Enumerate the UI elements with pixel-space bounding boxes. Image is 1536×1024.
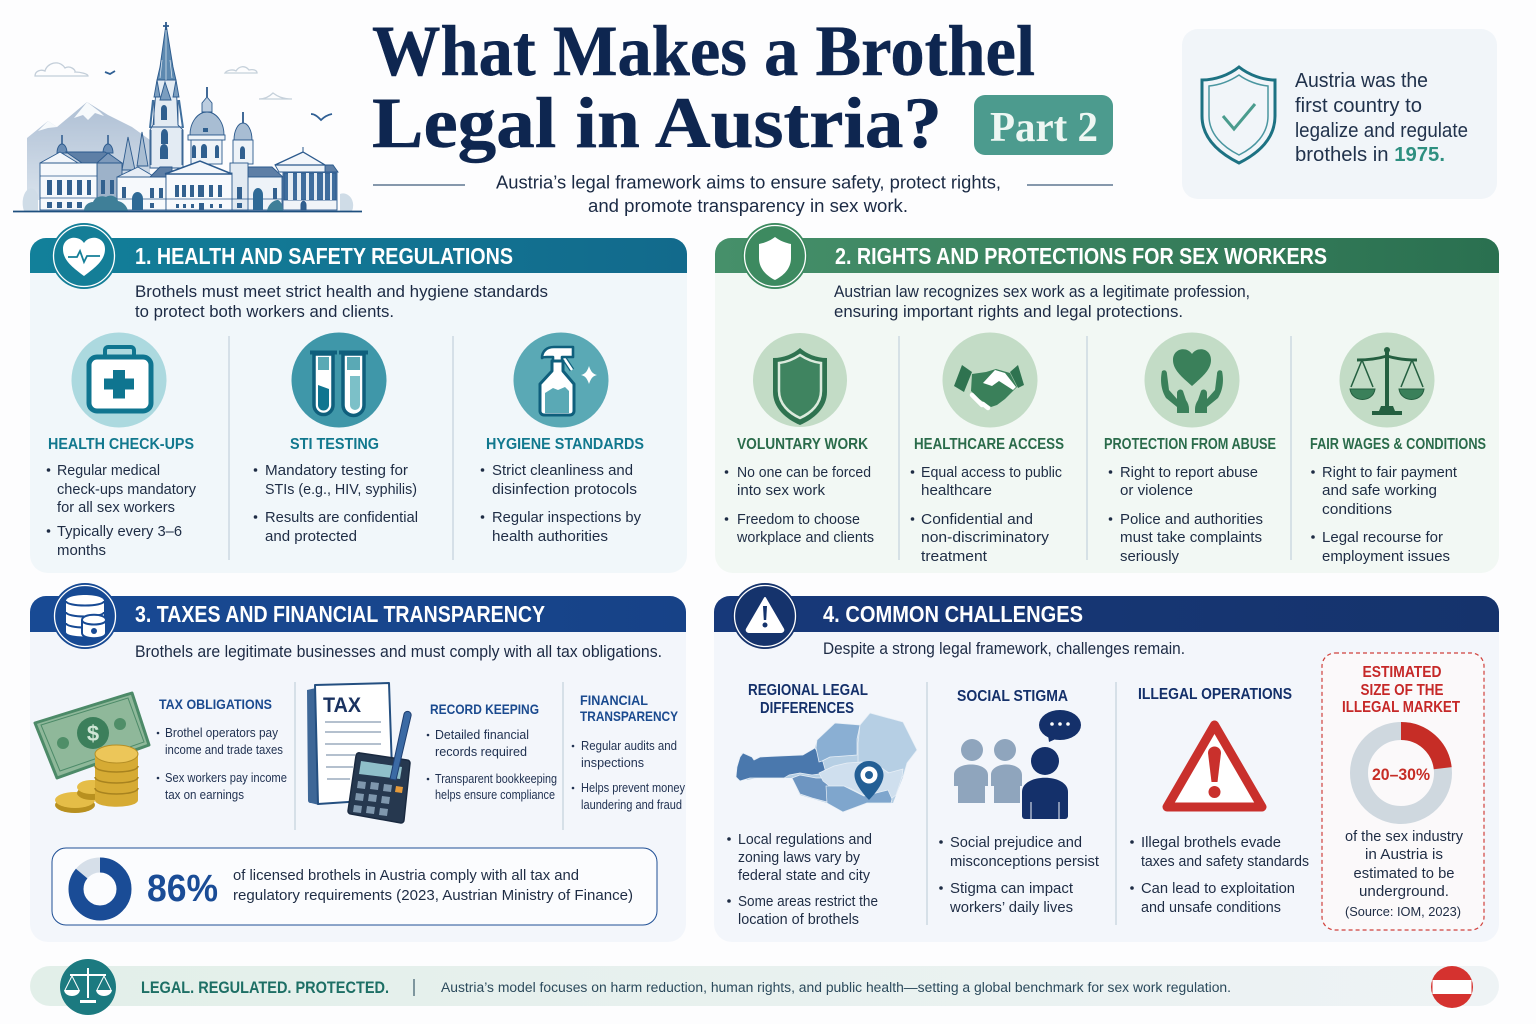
column: regional differences: REGIONAL LEGAL: [748, 682, 868, 699]
cathedral tower: [150, 22, 183, 168]
column: health check-ups: months: [57, 542, 106, 559]
column: regional differences: federal state and city: [738, 867, 870, 884]
column: fair wages: FAIR WAGES & CONDITIONS: [1310, 436, 1486, 453]
column: illegal operations: [1130, 686, 1309, 916]
column: health check-ups: Regular medical: [57, 462, 160, 479]
column: healthcare access: healthcare: [921, 482, 992, 499]
illustration: Austrian city skyline: [13, 22, 362, 212]
column: STI testing: and protected: [265, 528, 357, 545]
trees: [84, 196, 283, 211]
icon: scales: [60, 959, 116, 1015]
subtitle: Austria’s legal framework aims to ensure safety, protect rights,: [496, 172, 1001, 192]
badge: Part 2: [974, 95, 1113, 155]
heading bar: 4. COMMON CHALLENGES: [823, 601, 1083, 627]
column: social stigma: workers’ daily lives: [949, 899, 1073, 916]
column: health check-ups: [47, 332, 196, 559]
column: social stigma: misconceptions persist: [950, 853, 1100, 870]
icon: shield: [742, 223, 808, 289]
callout: first country: legalize and regulate: [1295, 120, 1468, 142]
callout: first country: [1182, 29, 1497, 199]
heading bar: [714, 596, 1499, 632]
stat box: 86%: regulatory requirements (2023, Austrian Ministry of Finance): [233, 887, 633, 904]
column: social stigma: [939, 688, 1100, 916]
column: fair wages: employment issues: [1322, 548, 1450, 565]
intro text: Despite a strong legal framework, challenges remain.: [823, 640, 1185, 658]
title: [372, 11, 1035, 163]
column: health check-ups: HEALTH CHECK-UPS: [48, 436, 194, 453]
illustration: cash and coins: [35, 693, 149, 813]
column: fair wages: [1310, 332, 1486, 565]
footer banner: Austria’s model focuses on harm reduction, human rights, and public health—setting a global benchmark for sex work regulation.: [441, 980, 1231, 995]
column: STI testing: Mandatory testing for: [265, 462, 408, 479]
title: What Makes a Brothel: [372, 11, 1035, 91]
illustration: tax form and calculator: [307, 683, 411, 823]
subtitle: [373, 172, 1113, 216]
column: financial transparency: [572, 692, 686, 812]
column: protection from abuse: Right to report abuse: [1120, 464, 1258, 481]
column: STI testing: Results are confidential: [265, 509, 418, 526]
column: record keeping: Transparent bookkeeping: [435, 772, 557, 786]
heading bar: 2. RIGHTS AND PROTECTIONS FOR SEX WORKERS: [835, 243, 1327, 269]
column: hygiene standards: Strict cleanliness and: [492, 462, 633, 479]
column: regional differences: DIFFERENCES: [760, 700, 854, 717]
right temple: [275, 152, 338, 210]
icon: Austrian flag: [1431, 966, 1473, 1008]
title: Legal in Austria?: [372, 83, 942, 163]
icon: people and speech bubble: [954, 710, 1081, 819]
column: healthcare access: Confidential and: [921, 511, 1033, 528]
column: healthcare access: non-discriminatory: [921, 529, 1050, 546]
callout: first country: first country to: [1295, 95, 1422, 117]
footer banner: LEGAL. REGULATED. PROTECTED.: [141, 979, 389, 997]
illustration: cash and coins: $: [87, 721, 99, 746]
icon: shield check: [1202, 67, 1275, 163]
icon: heart: [51, 223, 117, 289]
illustration: tax form and calculator: TAX: [323, 694, 361, 717]
column: voluntary work: workplace and clients: [736, 529, 874, 546]
callout: size of the illegal market: estimated to be: [1354, 865, 1454, 882]
column: hygiene standards: health authorities: [492, 528, 608, 545]
intro text: Austrian law recognizes sex work as a legitimate profession,: [834, 283, 1250, 301]
column: financial transparency: laundering and fraud: [581, 798, 682, 812]
callout: size of the illegal market: of the sex industry: [1345, 828, 1463, 845]
panel 3: taxes: [30, 583, 686, 942]
column: illegal operations: Can lead to exploitation: [1141, 880, 1295, 897]
column: hygiene standards: HYGIENE STANDARDS: [486, 436, 644, 453]
callout: size of the illegal market: SIZE OF THE: [1360, 682, 1444, 699]
column: health check-ups: check-ups mandatory: [57, 481, 196, 498]
column: healthcare access: treatment: [921, 548, 988, 565]
callout: size of the illegal market: ESTIMATED: [1362, 664, 1442, 681]
column: illegal operations: Illegal brothels evade: [1141, 834, 1281, 851]
column: protection from abuse: must take complaints: [1120, 529, 1262, 546]
column: regional differences: Some areas restrict the: [738, 893, 878, 910]
heading bar: 3. TAXES AND FINANCIAL TRANSPARENCY: [135, 601, 545, 627]
heading bar: 1. HEALTH AND SAFETY REGULATIONS: [135, 243, 513, 269]
column: financial transparency: Helps prevent money: [581, 781, 686, 795]
column: social stigma: Stigma can impact: [950, 880, 1074, 897]
panel 1: health and safety: [30, 223, 687, 573]
small dome: [233, 112, 253, 164]
column: social stigma: Social prejudice and: [950, 834, 1082, 851]
donut chart: 20–30%: [1359, 731, 1443, 815]
icon: coins database: [52, 583, 118, 649]
column: tax obligations: income and trade taxes: [165, 743, 283, 757]
column: healthcare access: [911, 332, 1064, 565]
column: protection from abuse: [1104, 332, 1276, 565]
column: hygiene standards: Regular inspections by: [492, 509, 641, 526]
donut chart: 86%: [76, 865, 124, 913]
badge: Part 2: Part 2: [990, 105, 1098, 151]
column: financial transparency: inspections: [581, 756, 644, 770]
column: regional differences: Local regulations and: [738, 831, 872, 848]
central palace: [117, 161, 283, 210]
callout: size of the illegal market: (Source: IOM, 2023): [1345, 905, 1461, 919]
callout: first country: Austria was the: [1295, 70, 1428, 92]
column: voluntary work: Freedom to choose: [737, 511, 860, 528]
column: STI testing: STI TESTING: [290, 436, 379, 453]
stat box: 86%: 86%: [147, 868, 218, 910]
callout: size of the illegal market: ILLEGAL MARKET: [1342, 699, 1460, 716]
column: record keeping: Detailed financial: [435, 728, 529, 742]
intro text: [834, 283, 1250, 321]
column: record keeping: records required: [435, 745, 527, 759]
map of Austria: [736, 713, 917, 812]
column: regional differences: zoning laws vary by: [738, 849, 860, 866]
intro text: Brothels must meet strict health and hygiene standards: [135, 283, 548, 301]
panel 2: rights and protections: [715, 223, 1499, 573]
column: hygiene standards: [481, 332, 644, 545]
intro text: Brothels are legitimate businesses and must comply with all tax obligations.: [135, 643, 662, 661]
column: health check-ups: for all sex workers: [57, 499, 175, 516]
column: regional differences: location of brothels: [738, 911, 859, 928]
panel 4: common challenges: [714, 583, 1499, 942]
column: tax obligations: [157, 696, 287, 802]
column: STI testing: [254, 332, 418, 545]
column: social stigma: SOCIAL STIGMA: [957, 688, 1068, 705]
intro text: to protect both workers and clients.: [135, 303, 394, 321]
birds: [105, 71, 332, 120]
icon: map pin: [854, 761, 884, 800]
subtitle: and promote transparency in sex work.: [588, 196, 908, 216]
column: voluntary work: into sex work: [737, 482, 825, 499]
column: voluntary work: No one can be forced: [737, 464, 871, 481]
heading bar: [30, 596, 686, 632]
column: protection from abuse: PROTECTION FROM ABUSE: [1104, 436, 1276, 453]
ground line: [13, 210, 362, 212]
main dome: [188, 87, 225, 164]
column: voluntary work: [725, 333, 874, 546]
intro text: [135, 283, 548, 321]
column: illegal operations: and unsafe conditions: [1141, 899, 1281, 916]
heading bar: [30, 238, 687, 273]
column: fair wages: Right to fair payment: [1322, 464, 1458, 481]
column: healthcare access: Equal access to public: [921, 464, 1062, 481]
callout: size of the illegal market: [1322, 653, 1484, 930]
column: record keeping: helps ensure compliance: [435, 788, 555, 802]
left palace: [40, 135, 122, 210]
column: voluntary work: VOLUNTARY WORK: [737, 436, 868, 453]
column: record keeping: RECORD KEEPING: [430, 701, 539, 717]
column: illegal operations: ILLEGAL OPERATIONS: [1138, 686, 1292, 703]
column: regional differences: [727, 682, 917, 928]
column: protection from abuse: seriously: [1120, 548, 1179, 565]
column: healthcare access: HEALTHCARE ACCESS: [914, 436, 1064, 453]
column: tax obligations: Brothel operators pay: [165, 726, 279, 740]
column: health check-ups: Typically every 3–6: [57, 523, 182, 540]
column: financial transparency: Regular audits and: [581, 739, 677, 753]
column: tax obligations: tax on earnings: [165, 788, 244, 802]
column: financial transparency: FINANCIAL: [580, 692, 648, 708]
column: tax obligations: TAX OBLIGATIONS: [159, 696, 272, 712]
column: financial transparency: TRANSPARENCY: [580, 708, 679, 724]
stat box: 86%: of licensed brothels in Austria comply with all tax and: [233, 867, 579, 884]
column: fair wages: Legal recourse for: [1322, 529, 1443, 546]
column: tax obligations: Sex workers pay income: [165, 771, 287, 785]
stat box: 86%: [52, 848, 657, 925]
callout: size of the illegal market: in Austria is: [1365, 846, 1443, 863]
column: fair wages: and safe working: [1322, 482, 1437, 499]
column: protection from abuse: Police and authorities: [1120, 511, 1263, 528]
callout: size of the illegal market: underground.: [1359, 883, 1449, 900]
column: STI testing: STIs (e.g., HIV, syphilis): [265, 481, 417, 498]
mountains: [27, 102, 150, 200]
heading bar: [715, 238, 1499, 273]
column: record keeping: [427, 701, 557, 802]
icon: warning: [732, 583, 798, 649]
callout: first country: brothels in 1975.: [1295, 144, 1445, 166]
footer banner: [30, 959, 1499, 1015]
column: fair wages: conditions: [1322, 501, 1392, 518]
column: illegal operations: taxes and safety standards: [1141, 853, 1309, 870]
column: protection from abuse: or violence: [1120, 482, 1193, 499]
icon: red warning triangle: [1167, 725, 1262, 807]
clouds: [35, 63, 88, 76]
callout: size of the illegal market: 20–30%: [1372, 766, 1430, 784]
column: hygiene standards: disinfection protocols: [492, 481, 637, 498]
spires: [122, 132, 148, 170]
intro text: ensuring important rights and legal protections.: [834, 303, 1183, 321]
